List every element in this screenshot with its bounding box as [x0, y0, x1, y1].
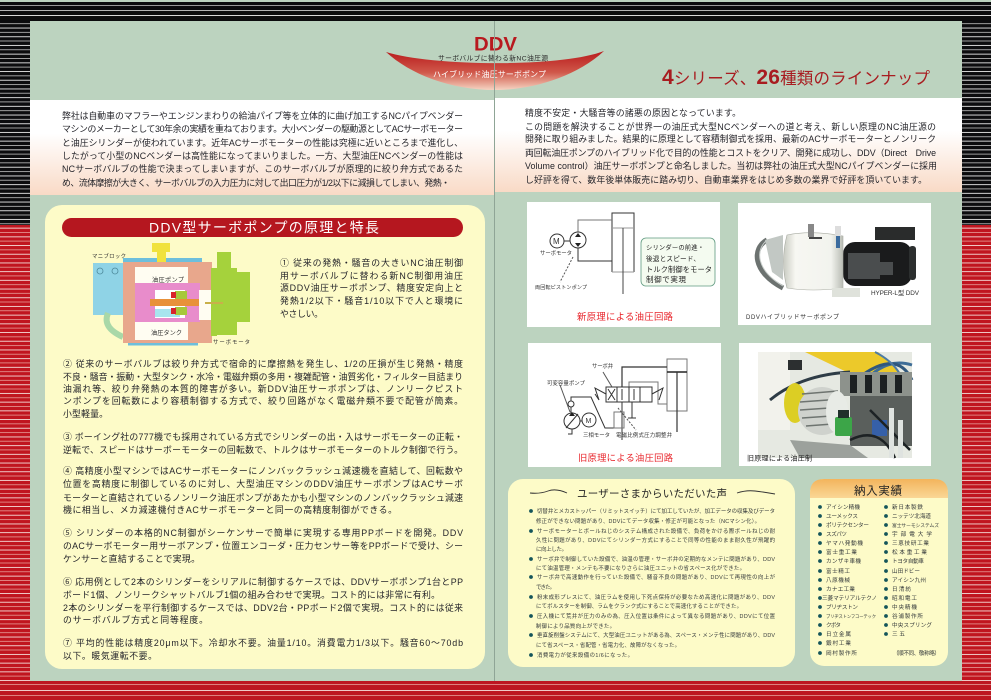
intro text right: この問題を解決することが世界一の油圧式大型NCベンダーへの道と考え、新しい原理のNC油圧源の	[525, 121, 936, 132]
intro text right: 両回転油圧ポンプのハイブリッド化で目的の性能とコストをクリア、開発に成功し、DDV（Direct Drive	[525, 147, 936, 158]
bullets	[529, 509, 533, 657]
voices text: 久性に問題があり、DDVにてシリンダー方式にすることで同等の性能のまま耐久性が飛躍的	[536, 536, 775, 544]
company list left: ポリテクセンター	[826, 521, 869, 529]
feature 6: のサーボバルブ方式と同等程度。	[63, 614, 208, 625]
label: servo motor: サーボモータ	[540, 249, 572, 257]
feature 4	[63, 465, 463, 515]
company list right: 三五	[892, 631, 905, 638]
company list left: 日立金属	[826, 630, 851, 638]
company list right: トヨタ自動車	[892, 557, 924, 565]
feature 2: ンポンプを回転数により容積制御する方式で、絞り回路がなく電磁弁類不要で配管が簡素。	[63, 395, 463, 406]
company list left: アイシン精機	[826, 503, 860, 511]
voices text: 制御により品質向上ができた。	[536, 622, 615, 630]
company list right: 昭和電工	[892, 594, 917, 602]
intro text right: 精度不安定・大騒音等の諸悪の原因となっています。	[525, 107, 741, 118]
feature 1: 発熱1/2以下・騒音1/10以下で人と環境に	[280, 295, 463, 306]
voices text: 圧入機にて荒井が圧力のみの為、圧入位置は条件によって異なる問題があり、DDVにて位置	[537, 612, 776, 620]
callout: 後退とスピード、	[646, 254, 700, 263]
label: servo valve: サーボ弁	[592, 362, 614, 370]
company list left	[822, 503, 877, 657]
company list left: 富士重工業	[826, 548, 857, 556]
voices text: できた。	[536, 584, 555, 591]
title DDV: DDV	[474, 34, 517, 56]
feature 1: やさしい。	[280, 309, 323, 319]
company list right: 新日本製鉄	[892, 503, 923, 511]
label: bidirectional piston pump: 両回転ピストンポンプ	[535, 284, 587, 291]
feature 5	[63, 527, 463, 564]
feature 3: ③ ボーイング社の777機でも採用されている方式でシリンダーの出・入はサーボモーターの正転・	[63, 431, 463, 442]
panel: new principle circuit	[527, 202, 720, 327]
diagram: pump cross-section	[92, 243, 250, 346]
feature 7: ⑦ 平均的性能は精度20μm以下。冷却水不要。油量1/10。消費電力1/3以下。騒音60～70db	[63, 637, 463, 648]
company list left: スズパツ	[826, 530, 847, 538]
company list left: 三菱マテリアルテクノ	[822, 594, 877, 602]
feature 1: ① 従来の発熱・騒音の大きいNC油圧制御	[280, 257, 463, 268]
label: variable displacement pump: 可変容量ポンプ	[547, 379, 586, 387]
panel: new principle circuit: M	[553, 237, 560, 246]
spine line	[494, 21, 495, 681]
label: hydraulic pump: 油圧ポンプ	[152, 276, 185, 284]
company list right: 三恵技研工業	[892, 539, 929, 547]
feature 6: 2本のシリンダーを平行制御するケースでは、DDV2台・PPボード2個で実現。コスト的には従来	[63, 602, 463, 613]
intro band left	[30, 100, 494, 195]
intro text left: と油圧シリンダーが使われています。近年ACサーボモーターの性能は究極に近いところまで進化し、	[62, 137, 463, 148]
company list right: 宇部電大学	[892, 530, 932, 538]
intro text left: マシンのメーカーとして30年余の実績を重ねております。大小ベンダーの駆動源としてACサーボモーター	[62, 123, 463, 134]
company list right: （順不同、敬称略）	[893, 649, 940, 657]
company list right: 日清紡	[892, 585, 911, 593]
feature 3: 逆転で、スピードはサーボーモーターの回転数で、トルクはサーボモーターのトルク制御で行う。	[63, 444, 463, 455]
company list left: ブリヂストンフコーテック	[826, 613, 876, 620]
voices text: にて省スペース・省配管・省電力化、故障がなくなった。	[536, 641, 680, 649]
label: proportional pressure valve: 電磁比例式圧力調整弁	[616, 431, 673, 439]
panel: principle and features	[45, 205, 485, 669]
intro text left: したがって小型のNCベンダーは高性能になってまいりました。一方、大型油圧NCベンダーの性能は	[62, 150, 463, 161]
feature 2	[63, 358, 463, 419]
company list left: ヤマハ発動機	[826, 539, 863, 547]
feature 4: ④ 高精度小型マシンではACサーボモーターにノンバックラッシュ減速機を直結して、回転数や	[63, 465, 463, 476]
voices text: サーボ弁で高速動作を行っていた設備で、騒音不良の問題があり、DDVにて再現性の向上が	[537, 573, 776, 581]
caption: 新原理による油圧回路	[577, 311, 674, 322]
intro text right	[525, 107, 937, 185]
voices text: 修正ができない問題があり、DDVにてデータ収集・修正が可能となった（NCマシン化）。	[536, 517, 760, 525]
intro text right: Volume control）油圧サーボポンプと命名しました。当初は弊社の油圧式大型NCパイプベンダーに採用	[525, 160, 937, 171]
company list left: ユーメックス	[826, 513, 858, 520]
company list left: クボタ	[826, 621, 841, 629]
feature 3	[63, 431, 463, 455]
voices text: 粉末成形プレスにて、油圧ラムを使用し下死点保持が必要なため高速化に問題があり、DDV	[537, 593, 775, 601]
panel: delivery record	[810, 479, 948, 666]
feature 6	[63, 576, 463, 625]
feature 1: 用サーボバルブに替わる新NC制御用油圧	[280, 270, 463, 281]
caption: 旧原理による油圧回路	[578, 452, 674, 463]
company list right: ニッテツ北海道	[892, 512, 931, 520]
company list right: 山田ドビー	[892, 567, 920, 575]
voices text: 切替弁とメカストッパー（リミットスイッチ）にて加工していたが、加工データの収集及びデータ	[537, 507, 775, 515]
heading bar: DDV型サーボポンプの原理と特長	[149, 220, 379, 236]
panel: user voices	[508, 479, 795, 667]
intro band right	[495, 98, 962, 192]
lineup heading: 4シリーズ、26種類のラインナップ	[662, 66, 930, 89]
intro text left	[62, 110, 463, 188]
company list left: 富士精工	[826, 567, 850, 575]
company list right: 中央スプリング	[892, 621, 932, 629]
company list left: 岡村製作所	[826, 649, 857, 657]
panel: old principle circuit: M	[586, 418, 592, 425]
voices text: に向上した。	[536, 545, 567, 553]
label: manifold block: マニブロック	[92, 252, 126, 260]
voices text: サーボ弁で制御していた設備で、油温の管理・サーボ弁の定期的なメンテに問題があり、DDV	[537, 555, 775, 563]
caption: DDVハイブリッドサーボポンプ	[746, 313, 839, 321]
callout: トルク制御をモータ	[646, 265, 712, 274]
company list right: アイシン九州	[892, 576, 926, 584]
header	[810, 479, 948, 498]
callout: シリンダーの前進・	[646, 242, 704, 252]
label: HYPER-L: HYPER-L型 DDV	[871, 288, 920, 297]
feature 1	[280, 257, 463, 319]
feature 2: 小型軽量。	[63, 409, 108, 419]
swoosh banner	[386, 51, 604, 90]
feature 6: ⑥ 応用例として2本のシリンダーをシリアルに制御するケースでは、DDVサーボポンプ1台とPP	[63, 576, 463, 587]
voices text	[536, 507, 776, 659]
panel: DDV hybrid servo pump photo	[738, 203, 931, 325]
company list left: ブリヂストン	[826, 603, 858, 611]
voices text: サーボモーターとボールねじのシステム構成された設備で、負荷をかける際ボールねじの耐	[537, 527, 776, 535]
black stripe band: top and sides	[0, 2, 991, 225]
intro text left: め、流体摩擦が大きく、サーボバルブの入力圧力に対して出口圧力が1/2以下に減損してしまい、発熱・	[62, 177, 450, 188]
company list right: 谷浦製作所	[892, 612, 923, 620]
feature 2: 不良・騒音・振動・大型タンク・水冷・電磁弁類の多用・複雑配管・油質劣化・フィルター目詰まり	[63, 371, 463, 382]
company list left: カンザキ車機	[826, 557, 861, 565]
panel: old principle circuit	[528, 343, 721, 467]
feature 5: ケンサーと直結することで実現。	[63, 553, 200, 564]
callout: 制御で実現	[646, 274, 686, 284]
feature 6: ボード1個、ノンリークシャットバルブ1個の組み合わせで実現。コスト的には非常に有利。	[63, 589, 440, 600]
voices text: にてボルスターを制御、ラムをクランク式にすることで高速化することができた。	[536, 602, 742, 610]
company list right: 富士サーモシステムズ	[892, 522, 939, 529]
label: three-phase motor: 三相モータ	[583, 431, 610, 439]
bullets	[818, 505, 888, 655]
heading bar	[62, 218, 463, 237]
panel: old principle photo	[739, 343, 931, 466]
company list left: 鍛村工業	[826, 639, 851, 647]
feature 1: 源DDV油圧サーボポンプ、精度安定向上と	[280, 282, 463, 293]
feature 4: 位置を高精度に制御しているのに対し、大型油圧マシンのDDV油圧サーボポンプはACサーボ	[63, 478, 463, 489]
subtitle: サーボバルブに替わる新NC油圧源	[438, 54, 548, 62]
callout	[641, 238, 715, 286]
intro text left: NCサーボバルブの性能で決まってしまいますが、このサーボバルブが原理的に絞り弁方式であるた	[62, 163, 463, 174]
feature 7	[63, 637, 463, 661]
company list right: 中央精機	[892, 603, 917, 611]
intro text left: 弊社は自動車のマフラーやエンジンまわりの給油パイプ等を立体的に曲げ加工するNCパイプベンダー	[62, 110, 463, 121]
feature 4: モーターと直結されているノンリーク油圧ポンプがあたかも小型マシンのノンバックラッシュ減速	[63, 492, 463, 503]
label: servo motor: サーボモータ	[213, 338, 250, 346]
feature 5: ⑤ シリンダーの本格的NC制御がシーケンサーで簡単に実現する専用PPボードを開発。DDV	[63, 527, 463, 538]
label: oil tank: 油圧タンク	[151, 329, 182, 337]
heading: ユーザーさまからいただいた声	[577, 487, 727, 500]
intro text right: 開発に取り組みました。結果的に原理として容積制御式を採用、最新のACサーボモーターとノンリーク	[525, 133, 936, 144]
feature 7: 以下。暖気運転不要。	[63, 650, 157, 661]
voices text: にて油温管理・メンテも不要になりさらに油圧ユニットの省スペース化ができた。	[536, 564, 745, 572]
company list right	[892, 503, 940, 657]
banner text: hybrid pump: ハイブリッド油圧サーボポンプ	[433, 69, 546, 79]
caption: 旧原理による油圧制	[747, 454, 812, 462]
company list right: 松本重工業	[892, 548, 927, 556]
header: 納入実績	[854, 484, 902, 498]
company list left: カナエ工業	[826, 585, 855, 593]
feature 2: ② 従来のサーボバルブは絞り弁方式で宿命的に摩擦熱を発生し、1/2の圧損が生じ発熱・精度	[63, 358, 463, 369]
red stripe band: sides and bottom	[0, 225, 991, 700]
feature 5: のACサーボモーター用サーボアンプ・位置エンコーダ・圧力センサー等をPPボードで受け、シー	[63, 540, 463, 551]
voices text: 垂直旋削盤システムにて、大型油圧ユニットがある為、スペース・メンテ性に問題があり、DDV	[537, 631, 775, 639]
feature 4: 機に相当し、メカ減速機付きACサーボモーターと同一の高精度制御ができる。	[63, 504, 397, 515]
voices text: 消費電力が従来設備の1/6になった。	[537, 651, 633, 659]
intro text right: し好評を得て、数年後単体販売に踏み切り、自動車業界をはじめ多数の業界で好評を頂いています。	[525, 174, 927, 185]
company list left: 八原機械	[826, 576, 850, 584]
feature 2: 油漏れ等、絞り弁発熱の本質的障害が多い。新DDV油圧サーボポンプは、ノンリークピスト	[63, 383, 463, 394]
